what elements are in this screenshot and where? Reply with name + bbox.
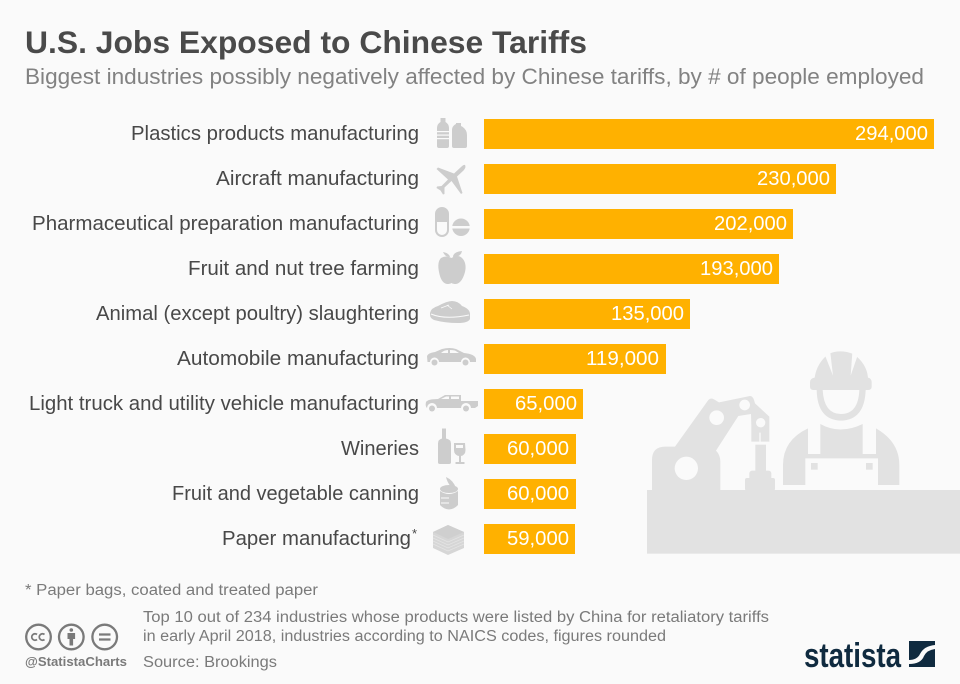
row: automobile: Automobile manufacturing bbox=[177, 347, 419, 370]
row: plastics bbox=[131, 118, 934, 149]
row: light truck: Light truck and utility vehicle manufacturing bbox=[29, 392, 419, 415]
row: light truck bbox=[29, 389, 583, 419]
row: aircraft: Aircraft manufacturing bbox=[216, 167, 419, 190]
bar bbox=[484, 299, 690, 329]
row: pharmaceutical bbox=[32, 207, 793, 239]
row: light truck: 65,000 bbox=[515, 392, 577, 415]
factory base bbox=[647, 490, 960, 554]
row: animal: 135,000 bbox=[611, 302, 684, 325]
row: fruit and nut: Fruit and nut tree farming bbox=[188, 257, 419, 280]
row: wineries bbox=[341, 428, 576, 464]
icon: creative commons licence bbox=[26, 625, 117, 649]
bar bbox=[484, 164, 836, 194]
row: wineries: Wineries bbox=[341, 437, 419, 460]
row: animal: Animal (except poultry) slaughtering bbox=[96, 302, 419, 325]
bar chart bbox=[29, 118, 934, 555]
description: in early April 2018, industries according to NAICS codes, figures rounded bbox=[143, 628, 666, 645]
row: plastics: Plastics products manufacturing bbox=[131, 122, 419, 145]
row: canning: Fruit and vegetable canning bbox=[172, 482, 419, 505]
row: aircraft bbox=[216, 164, 836, 194]
illustration: robot arm and worker bbox=[647, 351, 960, 554]
title: U.S. Jobs Exposed to Chinese Tariffs bbox=[25, 24, 587, 60]
bar bbox=[484, 209, 793, 239]
footnote: * Paper bags, coated and treated paper bbox=[25, 582, 318, 599]
logo: statista: statista bbox=[804, 637, 902, 675]
row: pharmaceutical: Pharmaceutical preparation manufacturing bbox=[32, 212, 419, 235]
row: canning bbox=[172, 477, 576, 510]
robot arm bbox=[652, 396, 775, 491]
bar bbox=[484, 254, 779, 284]
source: Source: Brookings bbox=[143, 654, 277, 671]
row: aircraft: 230,000 bbox=[757, 167, 830, 190]
row: pharmaceutical: 202,000 bbox=[714, 212, 787, 235]
bar bbox=[484, 344, 666, 374]
icon: pills bbox=[435, 207, 470, 237]
worker bbox=[783, 351, 899, 485]
row: plastics: 294,000 bbox=[855, 122, 928, 145]
row: paper: Paper manufacturing bbox=[222, 527, 411, 550]
row: animal bbox=[96, 299, 690, 329]
bar bbox=[484, 479, 576, 509]
icon: pickup truck bbox=[426, 395, 478, 412]
icon: meat bbox=[430, 301, 470, 323]
row: paper: * bbox=[412, 526, 417, 541]
description: Top 10 out of 234 industries whose products were listed by China for retaliatory tariffs bbox=[143, 609, 769, 626]
row: automobile: 119,000 bbox=[586, 347, 659, 370]
row: paper bbox=[222, 524, 575, 555]
icon: airplane bbox=[436, 165, 466, 194]
row: fruit and nut: 193,000 bbox=[700, 257, 773, 280]
row: automobile bbox=[177, 344, 666, 374]
row: canning: 60,000 bbox=[507, 482, 569, 505]
icon: can bbox=[440, 477, 458, 510]
bar bbox=[484, 524, 575, 554]
row: fruit and nut bbox=[188, 251, 779, 284]
bar bbox=[484, 119, 934, 149]
icon: paper stack bbox=[433, 525, 464, 555]
icon: car bbox=[427, 348, 476, 366]
bar bbox=[484, 389, 583, 419]
bar bbox=[484, 434, 576, 464]
subtitle: Biggest industries possibly negatively affected by Chinese tariffs, by # of people employed bbox=[25, 64, 924, 89]
icon: apple bbox=[438, 251, 466, 284]
row: paper: 59,000 bbox=[507, 527, 569, 550]
icon: bottles bbox=[437, 118, 467, 148]
social handle: @StatistaCharts bbox=[25, 655, 127, 669]
description bbox=[143, 609, 769, 645]
icon: wine bottle and glass bbox=[438, 428, 466, 464]
row: wineries: 60,000 bbox=[507, 437, 569, 460]
